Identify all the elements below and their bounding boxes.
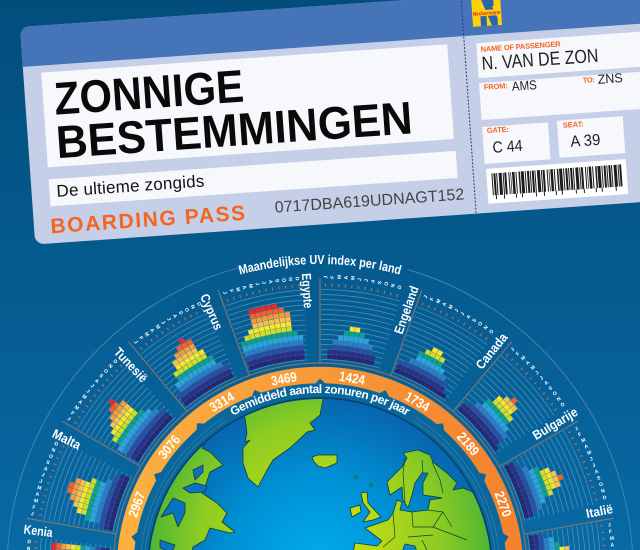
- ring values: 3469: [270, 369, 298, 389]
- sun hours ring: [72, 322, 568, 550]
- gate panel: [482, 122, 551, 164]
- grid lines: [0, 246, 640, 550]
- boarding pass label: BOARDING PASS: [50, 202, 246, 238]
- ring values: 1734: [402, 389, 433, 415]
- subtitle panel: [49, 151, 458, 206]
- gate label: GATE:: [487, 125, 509, 135]
- label Kenia: Kenia: [23, 522, 54, 540]
- label Malta: Malta: [50, 426, 84, 453]
- barcode: [486, 159, 628, 204]
- continents: [140, 388, 492, 550]
- Great Britain: [361, 492, 381, 522]
- ring values: [125, 369, 514, 519]
- ticket body: [20, 0, 640, 244]
- UV bars Malta: JFMAMJJASOND: [30, 439, 60, 520]
- Hudson Bay: [161, 498, 185, 527]
- name panel: [476, 22, 640, 78]
- perforation line: [461, 0, 476, 214]
- ring values: 3314: [207, 389, 237, 415]
- seat value: A 39: [570, 132, 601, 151]
- label Cyprus: Cyprus: [197, 291, 226, 332]
- ring values: 2967: [125, 490, 148, 519]
- North America: [150, 442, 236, 550]
- globe: [140, 388, 492, 550]
- gate value: C 44: [492, 138, 523, 157]
- label Tunesië: Tunesië: [111, 344, 151, 385]
- outer arc lines: [7, 268, 633, 550]
- panel: Kenia: [0, 243, 640, 550]
- small islands: [355, 476, 372, 486]
- title: BESTEMMINGEN: [54, 91, 414, 168]
- UV bars Cyprus: JFMAMJJASOND: [132, 293, 203, 354]
- Great Lakes: [160, 540, 175, 550]
- label Egypte: Egypte: [299, 273, 316, 309]
- label Bulgarije: Bulgarije: [530, 404, 580, 443]
- panel: Bulgarije: [0, 160, 640, 550]
- ticket code: 0717DBA619UDNAGT152: [274, 186, 465, 217]
- Mediterranean: [402, 544, 417, 550]
- passenger label: NAME OF PASSENGER: [480, 39, 561, 54]
- to value: ZNS: [597, 70, 623, 87]
- ring values: 2189: [454, 429, 482, 459]
- UV bars Tunesië: JFMAMJJASOND: [66, 353, 119, 428]
- subtitle: De ultieme zongids: [56, 172, 205, 201]
- Ireland: [350, 505, 361, 517]
- country borders: [383, 458, 467, 550]
- UV bars Italië: JFMAMJJASOND: [565, 425, 617, 502]
- chart title: monthly UV index: Maandelijkse UV index per land: [238, 254, 402, 274]
- Baffin inlet: [193, 465, 203, 480]
- panel: Malta: [0, 235, 640, 550]
- logo: Neckermann: Neckermann: [473, 10, 501, 18]
- Europe: [353, 450, 492, 550]
- label Canada: Canada: [472, 330, 511, 372]
- panel: Cyprus: [0, 162, 640, 550]
- panel: Canada: [0, 193, 640, 550]
- panel: Italië: [0, 177, 640, 550]
- from label: FROM:: [484, 81, 508, 92]
- UV bars Egypte: JFMAMJJASOND: [221, 267, 301, 306]
- seat panel: [557, 116, 625, 158]
- title panel: [41, 44, 454, 167]
- segment dividers: [27, 278, 613, 534]
- Hudson Strait: [183, 483, 207, 493]
- to label: TO:: [582, 75, 595, 85]
- logo: Neckermann: [470, 0, 502, 27]
- ring values: 2270: [492, 489, 514, 519]
- ring values: 3076: [155, 432, 184, 462]
- label Italië: Italië: [585, 501, 614, 521]
- panel: Engeland: [32, 271, 609, 550]
- passenger name: N. VAN DE ZON: [481, 46, 599, 75]
- seat label: SEAT:: [562, 119, 584, 130]
- UV bars Engeland: JFMAMJJASOND: [323, 274, 404, 290]
- from value: AMS: [511, 77, 538, 94]
- route panel: [479, 62, 640, 120]
- ring values: 1424: [338, 369, 367, 388]
- title: ZONNIGE: [52, 60, 245, 125]
- Iceland: [312, 455, 337, 468]
- label Engeland: Engeland: [391, 284, 422, 336]
- Greenland: [242, 399, 324, 488]
- ticket blue header band: [20, 0, 640, 67]
- title: [51, 48, 414, 168]
- panel: Tunesië: [0, 175, 640, 550]
- boarding pass ticket: [20, 0, 640, 244]
- UV bars Bulgarije: JFMAMJJASOND: [503, 346, 573, 409]
- panel: Egypte: [0, 198, 640, 550]
- ocean: [148, 398, 492, 550]
- UV bars Canada: JFMAMJJASOND: [419, 293, 499, 335]
- ring caption: Gemiddeld aantal zonuren per jaar: [230, 384, 410, 415]
